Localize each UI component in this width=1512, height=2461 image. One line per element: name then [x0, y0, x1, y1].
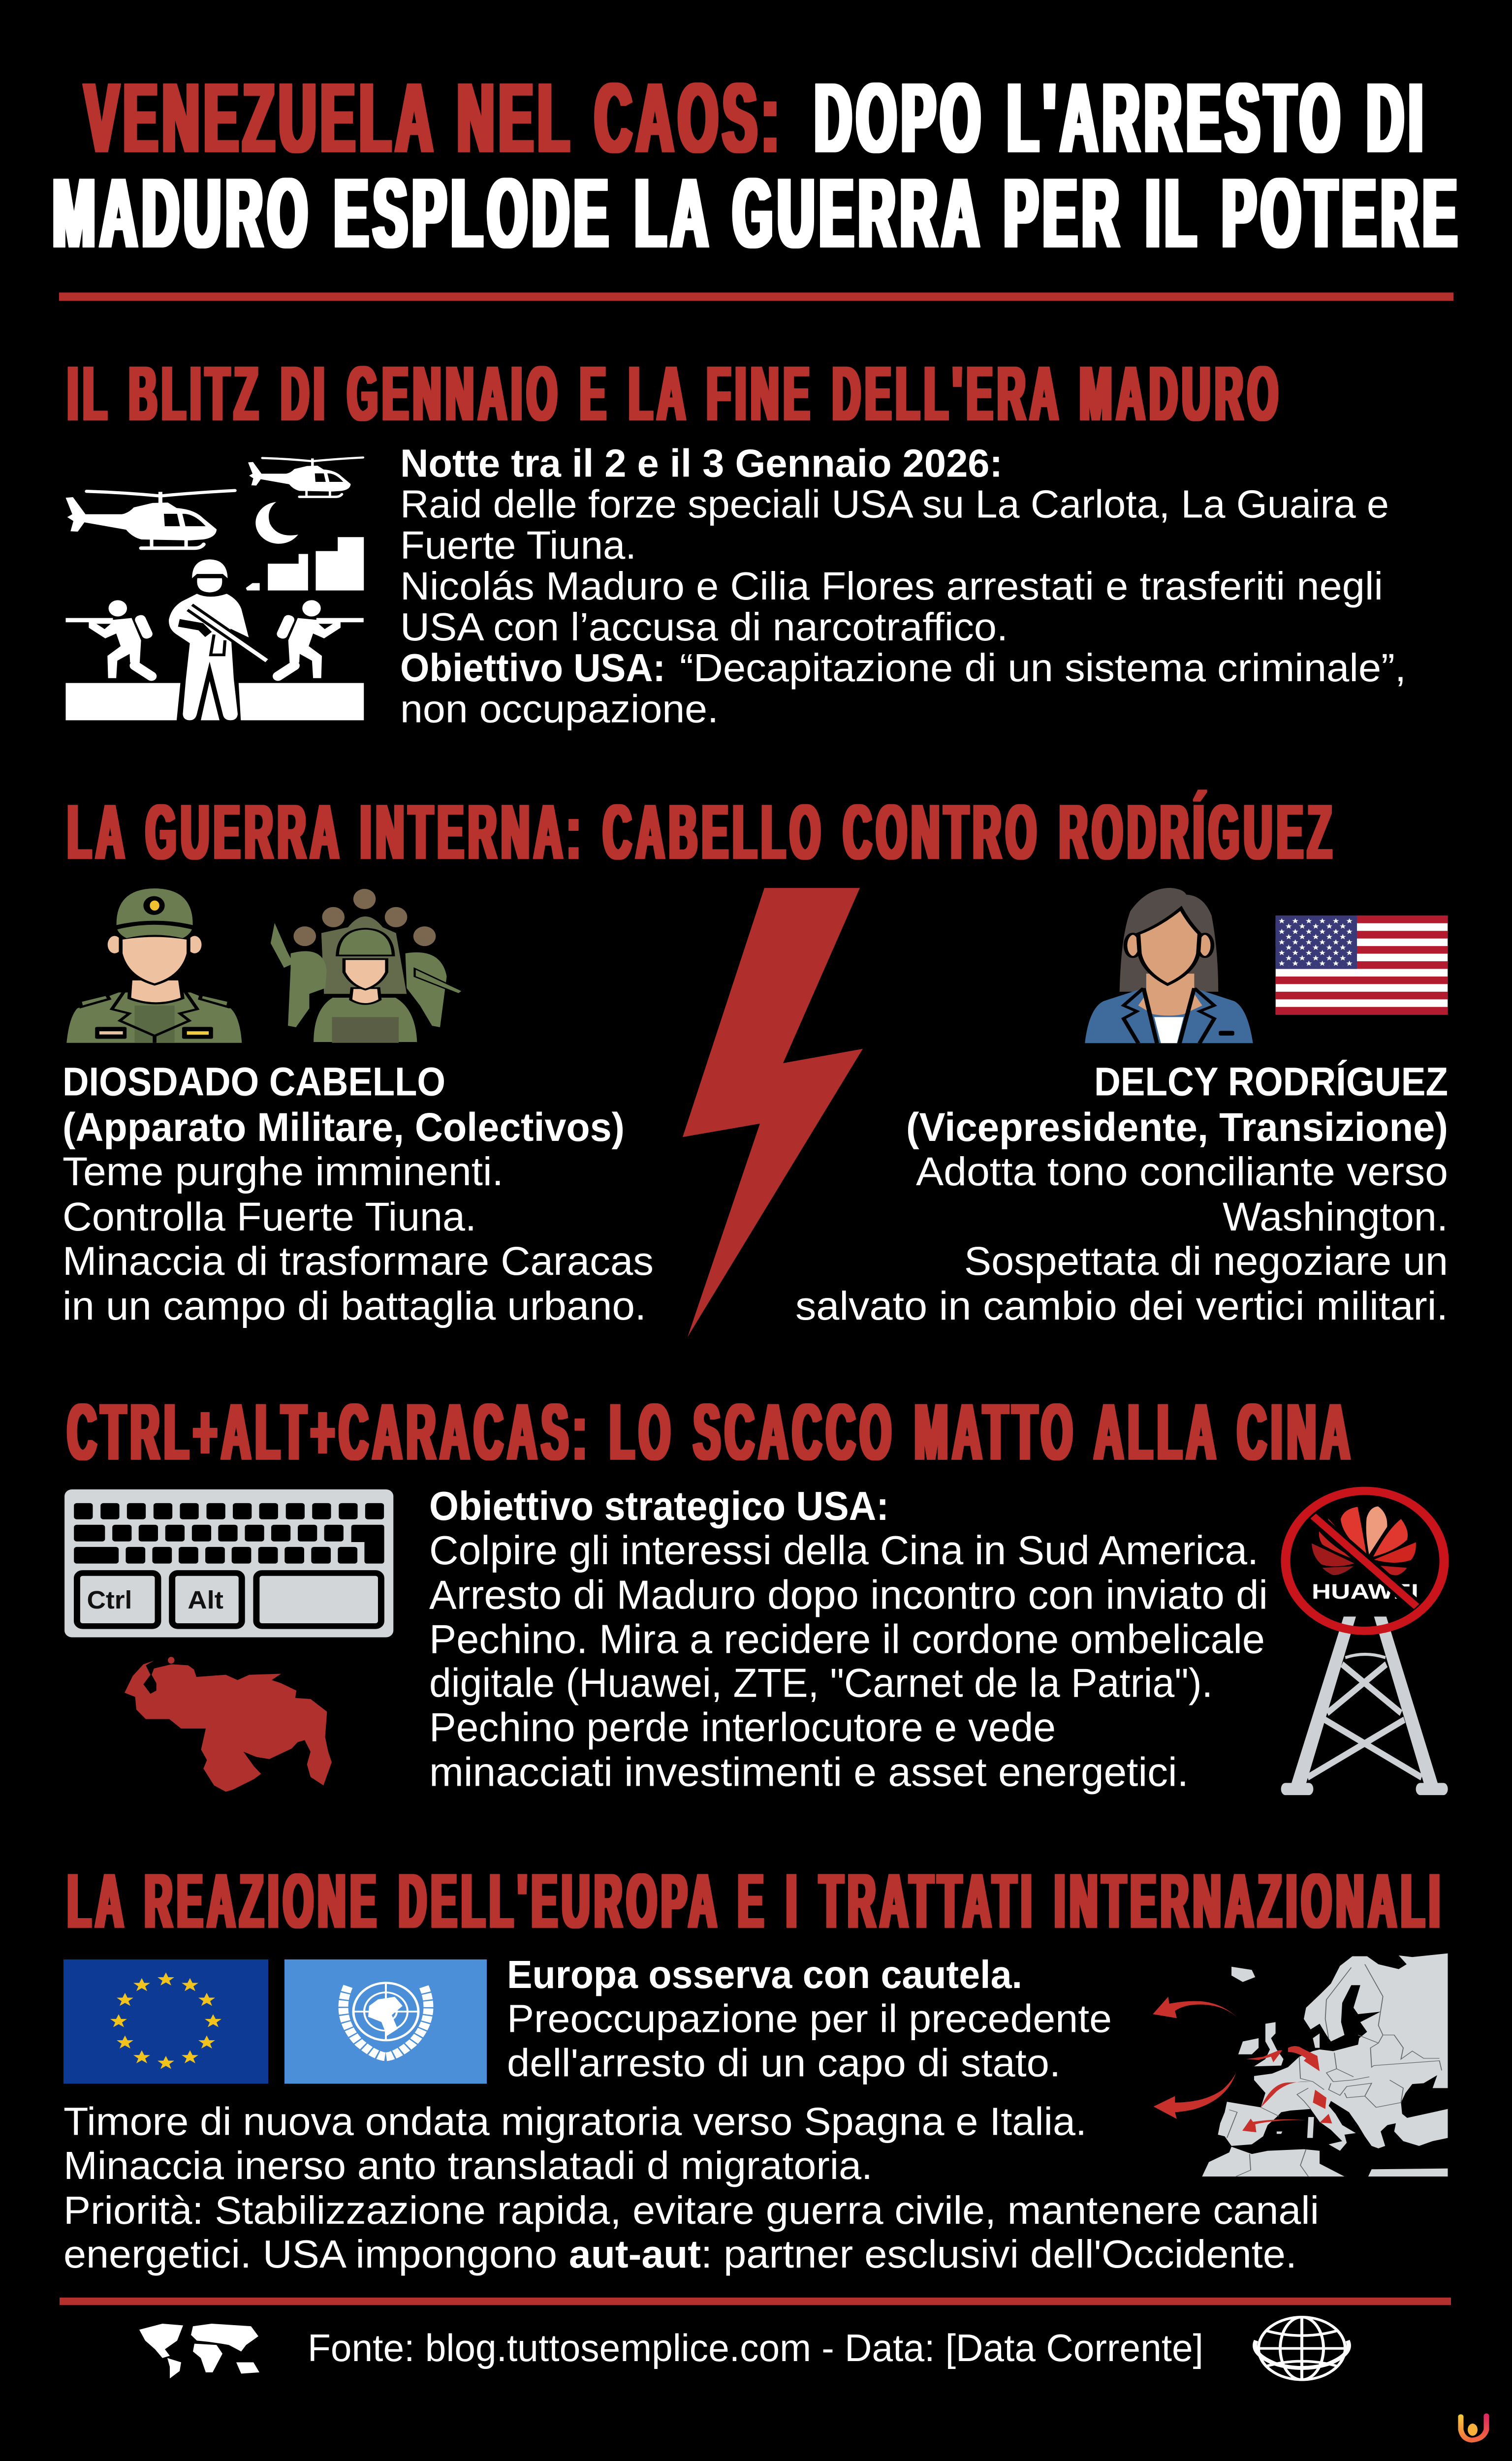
text block: cabello: Minaccia di trasformare Caracas — [63, 1239, 654, 1284]
icon: colectivos group — [271, 889, 463, 1043]
text block: timore e priorita — [63, 2100, 1319, 2276]
icon: eu flag — [63, 1959, 268, 2083]
text block: timore e priorita: : partner esclusivi dell'Occidente. — [701, 2232, 1297, 2276]
footer — [139, 2317, 1486, 2440]
text block: timore e priorita: Priorità: Stabilizzazione rapida, evitare guerra civile, mantenere canali — [63, 2188, 1319, 2232]
text block: obiettivo strategico: Pechino perde interlocutore e vede — [429, 1704, 1056, 1750]
icon: lightning bolt — [683, 888, 863, 1337]
text block: timore e priorita: Timore di nuova ondata migratoria verso Spagna e Italia. — [63, 2100, 1087, 2144]
text block: cabello: Teme purghe imminenti. — [63, 1149, 504, 1194]
icon: logo — [1461, 2416, 1486, 2440]
panel: ctrl+alt+caracas — [64, 1388, 1448, 1795]
icon: keyboard — [64, 1489, 393, 1637]
text: fonte: Fonte: blog.tuttosemplice.com - Data: [Data Corrente] — [308, 2327, 1203, 2369]
icon: globe — [1255, 2317, 1349, 2380]
text block: rodriguez: Washington. — [1223, 1195, 1448, 1239]
text block: cabello — [63, 1059, 654, 1328]
text block: raid: non occupazione. — [400, 687, 719, 731]
text block: obiettivo strategico: Arresto di Maduro dopo incontro con inviato di — [429, 1572, 1268, 1617]
icon: venezuela map — [125, 1657, 332, 1792]
text block: raid: Nicolás Maduro e Cilia Flores arrestati e trasferiti negli — [400, 564, 1383, 608]
text block: raid: Fuerte Tiuna. — [400, 523, 636, 567]
text block: rodriguez: salvato in cambio dei vertici militari. — [795, 1284, 1448, 1328]
icon: right soldier — [275, 600, 364, 678]
text block: raid — [400, 442, 1406, 731]
icon: usa flag — [1276, 915, 1448, 1014]
icon: ground — [65, 681, 364, 720]
icon: moon — [255, 502, 298, 544]
icon: rodriguez — [1085, 888, 1253, 1043]
icon: un flag — [284, 1959, 487, 2083]
text block: raid: USA con l’accusa di narcotraffico. — [400, 605, 1008, 649]
icon: small helicopter — [248, 457, 363, 497]
text block: cabello: in un campo di battaglia urbano. — [63, 1284, 646, 1328]
text block: raid: Notte tra il 2 e il 3 Gennaio 2026: — [400, 442, 1003, 485]
text block: cabello: (Apparato Militare, Colectivos) — [63, 1105, 625, 1150]
text block: timore e priorita: Minaccia inerso anto translatadi d migratoria. — [63, 2144, 873, 2187]
icon: keyboard: Alt — [188, 1586, 223, 1614]
icon: telecom tower — [1281, 1616, 1448, 1795]
text block: cabello: Controlla Fuerte Tiuna. — [63, 1195, 476, 1239]
text block: obiettivo strategico: Colpire gli interessi della Cina in Sud America. — [429, 1527, 1259, 1573]
text block: cabello: DIOSDADO CABELLO — [63, 1059, 445, 1104]
text block: obiettivo strategico — [429, 1483, 1268, 1795]
text block: europa osserva: Europa osserva con cautela. — [507, 1953, 1022, 1996]
icon: officer — [66, 888, 242, 1043]
panel: reazione europa — [63, 1859, 1448, 2276]
icon: banned huawei — [1286, 1491, 1444, 1631]
text block: rodriguez: Adotta tono conciliante verso — [916, 1149, 1448, 1194]
text block: obiettivo strategico: minacciati investimenti e asset energetici. — [429, 1749, 1189, 1795]
text block: timore e priorita: energetici. USA impongono — [63, 2232, 557, 2276]
text block: rodriguez — [795, 1059, 1448, 1328]
icon: military raid scene — [65, 457, 364, 720]
icon: buildings — [246, 537, 364, 591]
icon: central soldier — [169, 560, 267, 720]
title — [53, 63, 1462, 268]
text block: europa osserva — [507, 1953, 1112, 2084]
text block: obiettivo strategico: Pechino. Mira a recidere il cordone ombelicale — [429, 1616, 1265, 1662]
icon: europe map with migration arrows — [1153, 1954, 1448, 2177]
text block: raid: “Decapitazione di un sistema criminale”, — [680, 646, 1406, 690]
panel: la guerra interna — [63, 789, 1448, 1337]
text block: europa osserva: dell'arresto di un capo di stato. — [507, 2041, 1061, 2084]
panel: il blitz di gennaio — [65, 351, 1406, 731]
text block: raid: Raid delle forze speciali USA su La Carlota, La Guaira e — [400, 482, 1389, 526]
text block: obiettivo strategico: Obiettivo strategico USA: — [429, 1483, 889, 1529]
text block: europa osserva: Preoccupazione per il precedente — [507, 1996, 1112, 2040]
text block: raid: Obiettivo USA: — [400, 646, 665, 690]
text block: obiettivo strategico: digitale (Huawei, ZTE, "Carnet de la Patria"). — [429, 1660, 1213, 1705]
icon: world map — [139, 2324, 259, 2378]
text block: rodriguez: Sospettata di negoziare un — [964, 1239, 1448, 1284]
text block: timore e priorita: aut-aut — [569, 2232, 701, 2276]
icon: keyboard: Ctrl — [87, 1586, 132, 1614]
icon: left soldier — [65, 600, 154, 678]
icon: banned huawei: HUAWEI — [1312, 1580, 1418, 1603]
icon: large helicopter — [65, 491, 235, 548]
